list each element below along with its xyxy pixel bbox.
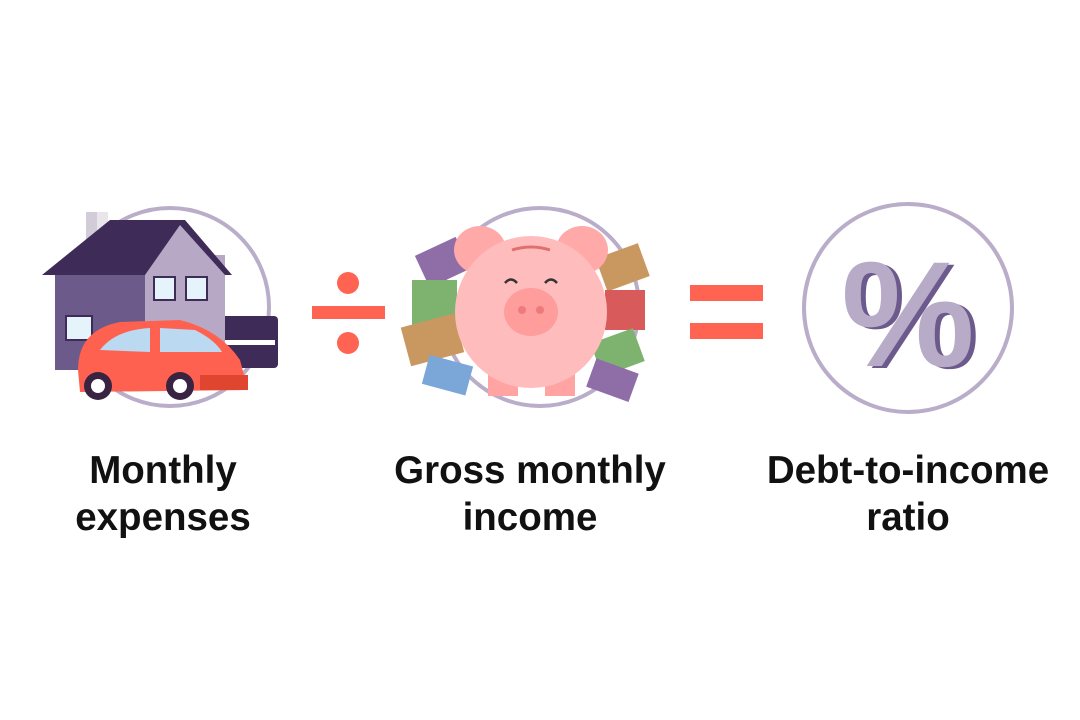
icon: piggy bank with money (401, 208, 650, 406)
label: monthly expenses: Monthly (89, 449, 237, 492)
icon: percent: % (846, 232, 980, 400)
icon: percent: % (841, 230, 975, 398)
icon: percent (804, 204, 1012, 412)
icon: divide (312, 272, 385, 354)
label: debt-to-income ratio (767, 449, 1049, 539)
label: debt-to-income ratio: Debt-to-income (767, 449, 1049, 492)
label: debt-to-income ratio: ratio (866, 496, 950, 539)
label: gross monthly income: income (463, 496, 597, 539)
label: gross monthly income: Gross monthly (394, 449, 666, 492)
icon: house car card (42, 208, 278, 406)
label: gross monthly income (394, 449, 666, 539)
icon: equals (690, 285, 763, 339)
label: monthly expenses: expenses (75, 496, 251, 539)
label: monthly expenses (75, 449, 251, 539)
